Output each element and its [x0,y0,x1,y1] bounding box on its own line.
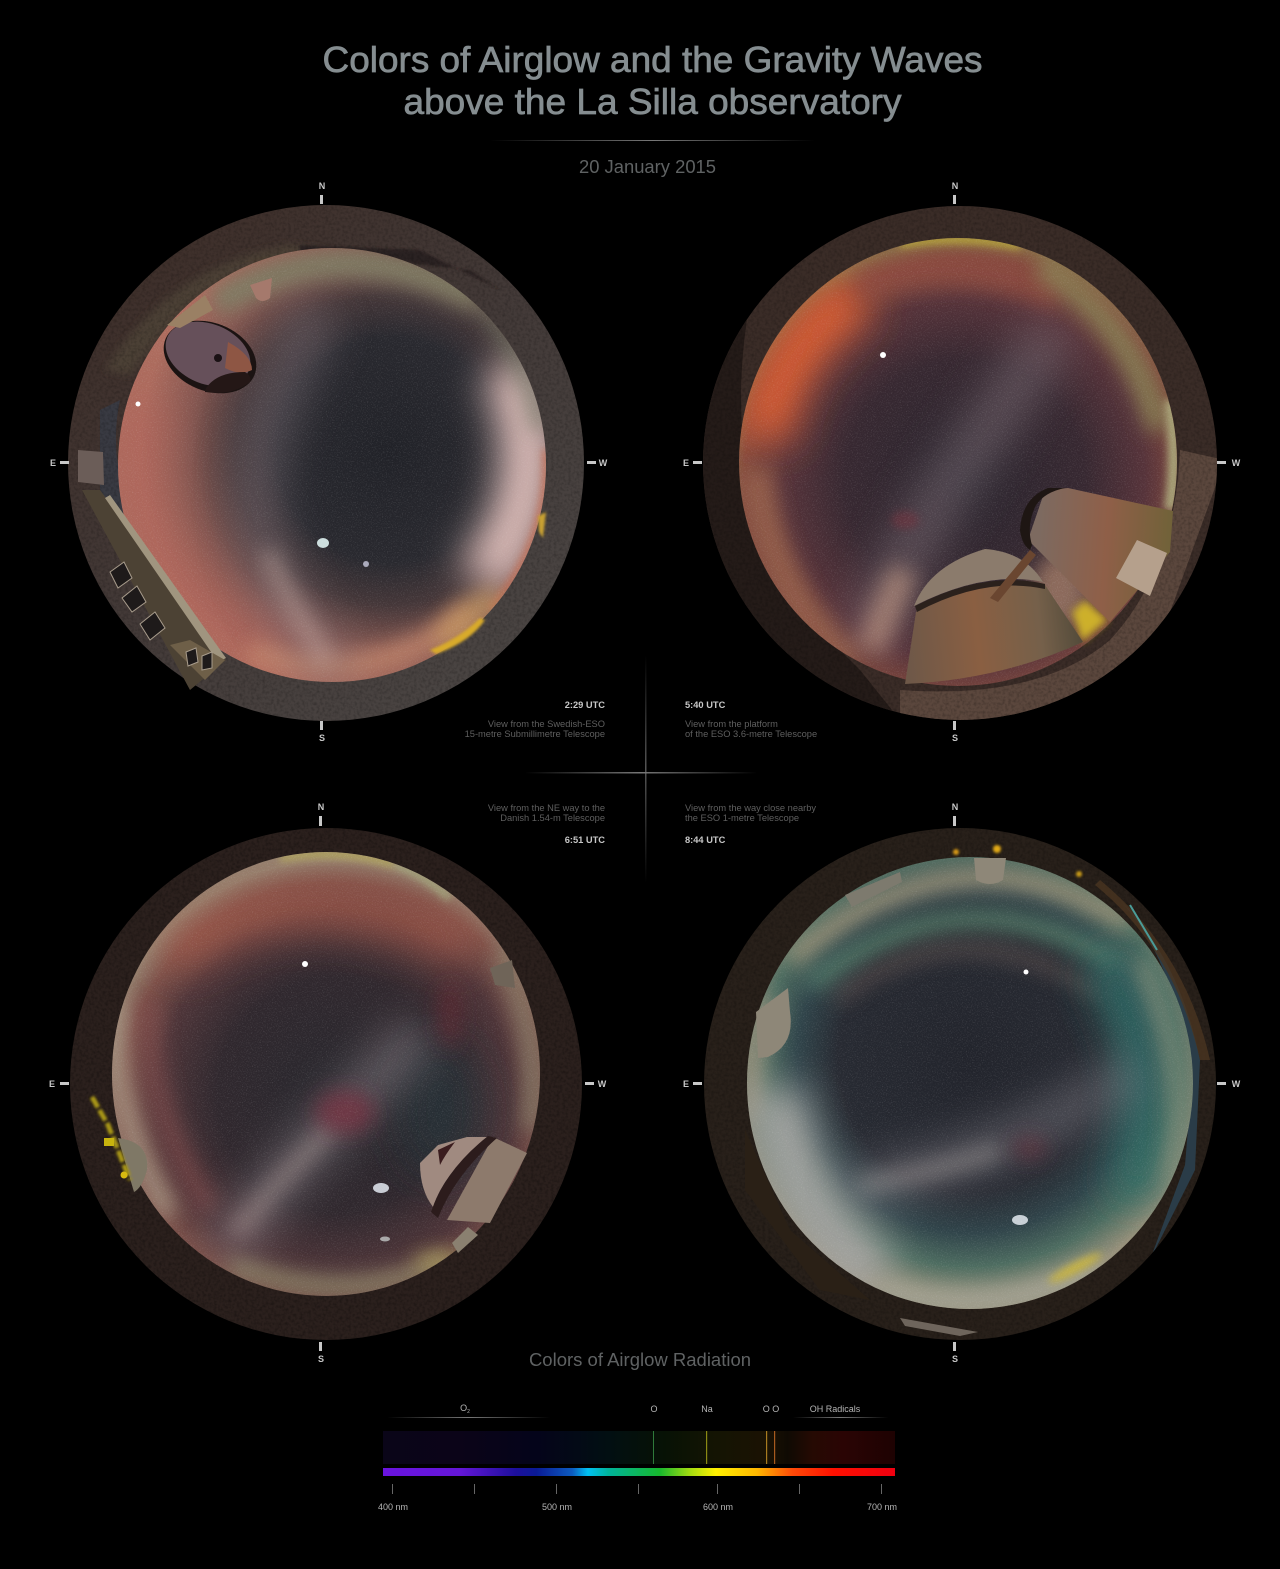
compass: panel 4: N [952,802,958,812]
compass: panel 1 [50,181,608,743]
compass: panel 4: W [1232,1079,1241,1089]
emission labels: O [650,1404,658,1414]
compass: panel 3: S [318,1354,324,1364]
emission labels: Na [701,1404,713,1414]
title: Colors of Airglow and the Gravity Waves [322,39,982,80]
caption: 8:44 UTC: View from the way close nearby [685,803,816,813]
centre cross divider [525,655,757,883]
emission labels [387,1403,888,1418]
compass: panel 2 [683,181,1241,743]
icon: dome telescope [905,549,1083,684]
compass: panel 2: E [683,458,689,468]
building [78,450,226,690]
caption: 5:40 UTC: View from the platform [685,719,778,729]
compass: panel 3: E [49,1079,55,1089]
panel: 5:40 UTC all-sky view [690,200,1230,730]
caption: 8:44 UTC: the ESO 1-metre Telescope [685,813,799,823]
compass: panel 2: S [952,733,958,743]
date subtitle: 20 January 2015 [579,156,716,177]
icon: radio dish telescope [153,278,272,407]
compass: panel 1: N [319,181,325,191]
yellow horizon glow [430,512,546,654]
icon: yellow glow between telescopes [1072,600,1108,642]
wavelength labels [378,1502,897,1512]
spectrum chart [378,1403,897,1512]
compass: panel 1: S [319,733,325,743]
title [322,39,982,122]
panel: 8:44 UTC all-sky view [700,825,1225,1345]
wavelength labels: 500 nm [542,1502,572,1512]
caption: 6:51 UTC: 6:51 UTC [565,835,605,845]
emission lines [653,1431,775,1464]
caption: 6:51 UTC [488,803,605,845]
title: above the La Silla observatory [404,81,902,122]
caption: 8:44 UTC [685,803,816,845]
caption: 2:29 UTC: 15-metre Submillimetre Telescope [465,729,605,739]
icon: dome with yellow lights [92,1097,147,1192]
caption: 8:44 UTC: 8:44 UTC [685,835,726,845]
caption: 6:51 UTC: View from the NE way to the [488,803,605,813]
compass: panel 4 [683,802,1241,1364]
icon: Danish telescope dome [420,1136,527,1253]
emission labels: O O [763,1404,779,1414]
caption: 2:29 UTC [465,700,605,739]
icon: telescope enclosure cylinder [1020,488,1173,622]
wavelength labels: 400 nm [378,1502,408,1512]
panel: 6:51 UTC all-sky view [65,825,590,1345]
compass: panel 1: W [599,458,608,468]
ground ring detail [60,200,590,730]
caption: 5:40 UTC: 5:40 UTC [685,700,726,710]
caption: 2:29 UTC: View from the Swedish-ESO [488,719,605,729]
milky way [257,310,340,680]
panel: 2:29 UTC all-sky view [60,200,590,730]
caption: 6:51 UTC: Danish 1.54-m Telescope [500,813,605,823]
caption: 5:40 UTC: of the ESO 3.6-metre Telescope [685,729,817,739]
building [490,960,515,988]
caption: 5:40 UTC [685,700,817,739]
colour scale bar [383,1468,895,1476]
emission labels: 2 [467,1409,470,1415]
compass: panel 3: N [318,802,324,812]
compass: panel 4: E [683,1079,689,1089]
compass: panel 2: N [952,181,958,191]
emission labels: OH Radicals [810,1404,861,1414]
compass: panel 4: S [952,1354,958,1364]
airglow spectrum [383,1431,895,1464]
compass: panel 3: W [598,1079,607,1089]
emission labels: O [460,1403,467,1413]
wavelength ticks [392,1484,882,1494]
caption: 2:29 UTC: 2:29 UTC [565,700,605,710]
compass: panel 2: W [1232,458,1241,468]
compass: panel 1: E [50,458,56,468]
spectrum heading: Colors of Airglow Radiation [529,1349,751,1370]
wavelength labels: 600 nm [703,1502,733,1512]
icon: domes and rim lights [745,845,1157,1336]
compass: panel 3 [49,802,607,1364]
wavelength labels: 700 nm [867,1502,897,1512]
